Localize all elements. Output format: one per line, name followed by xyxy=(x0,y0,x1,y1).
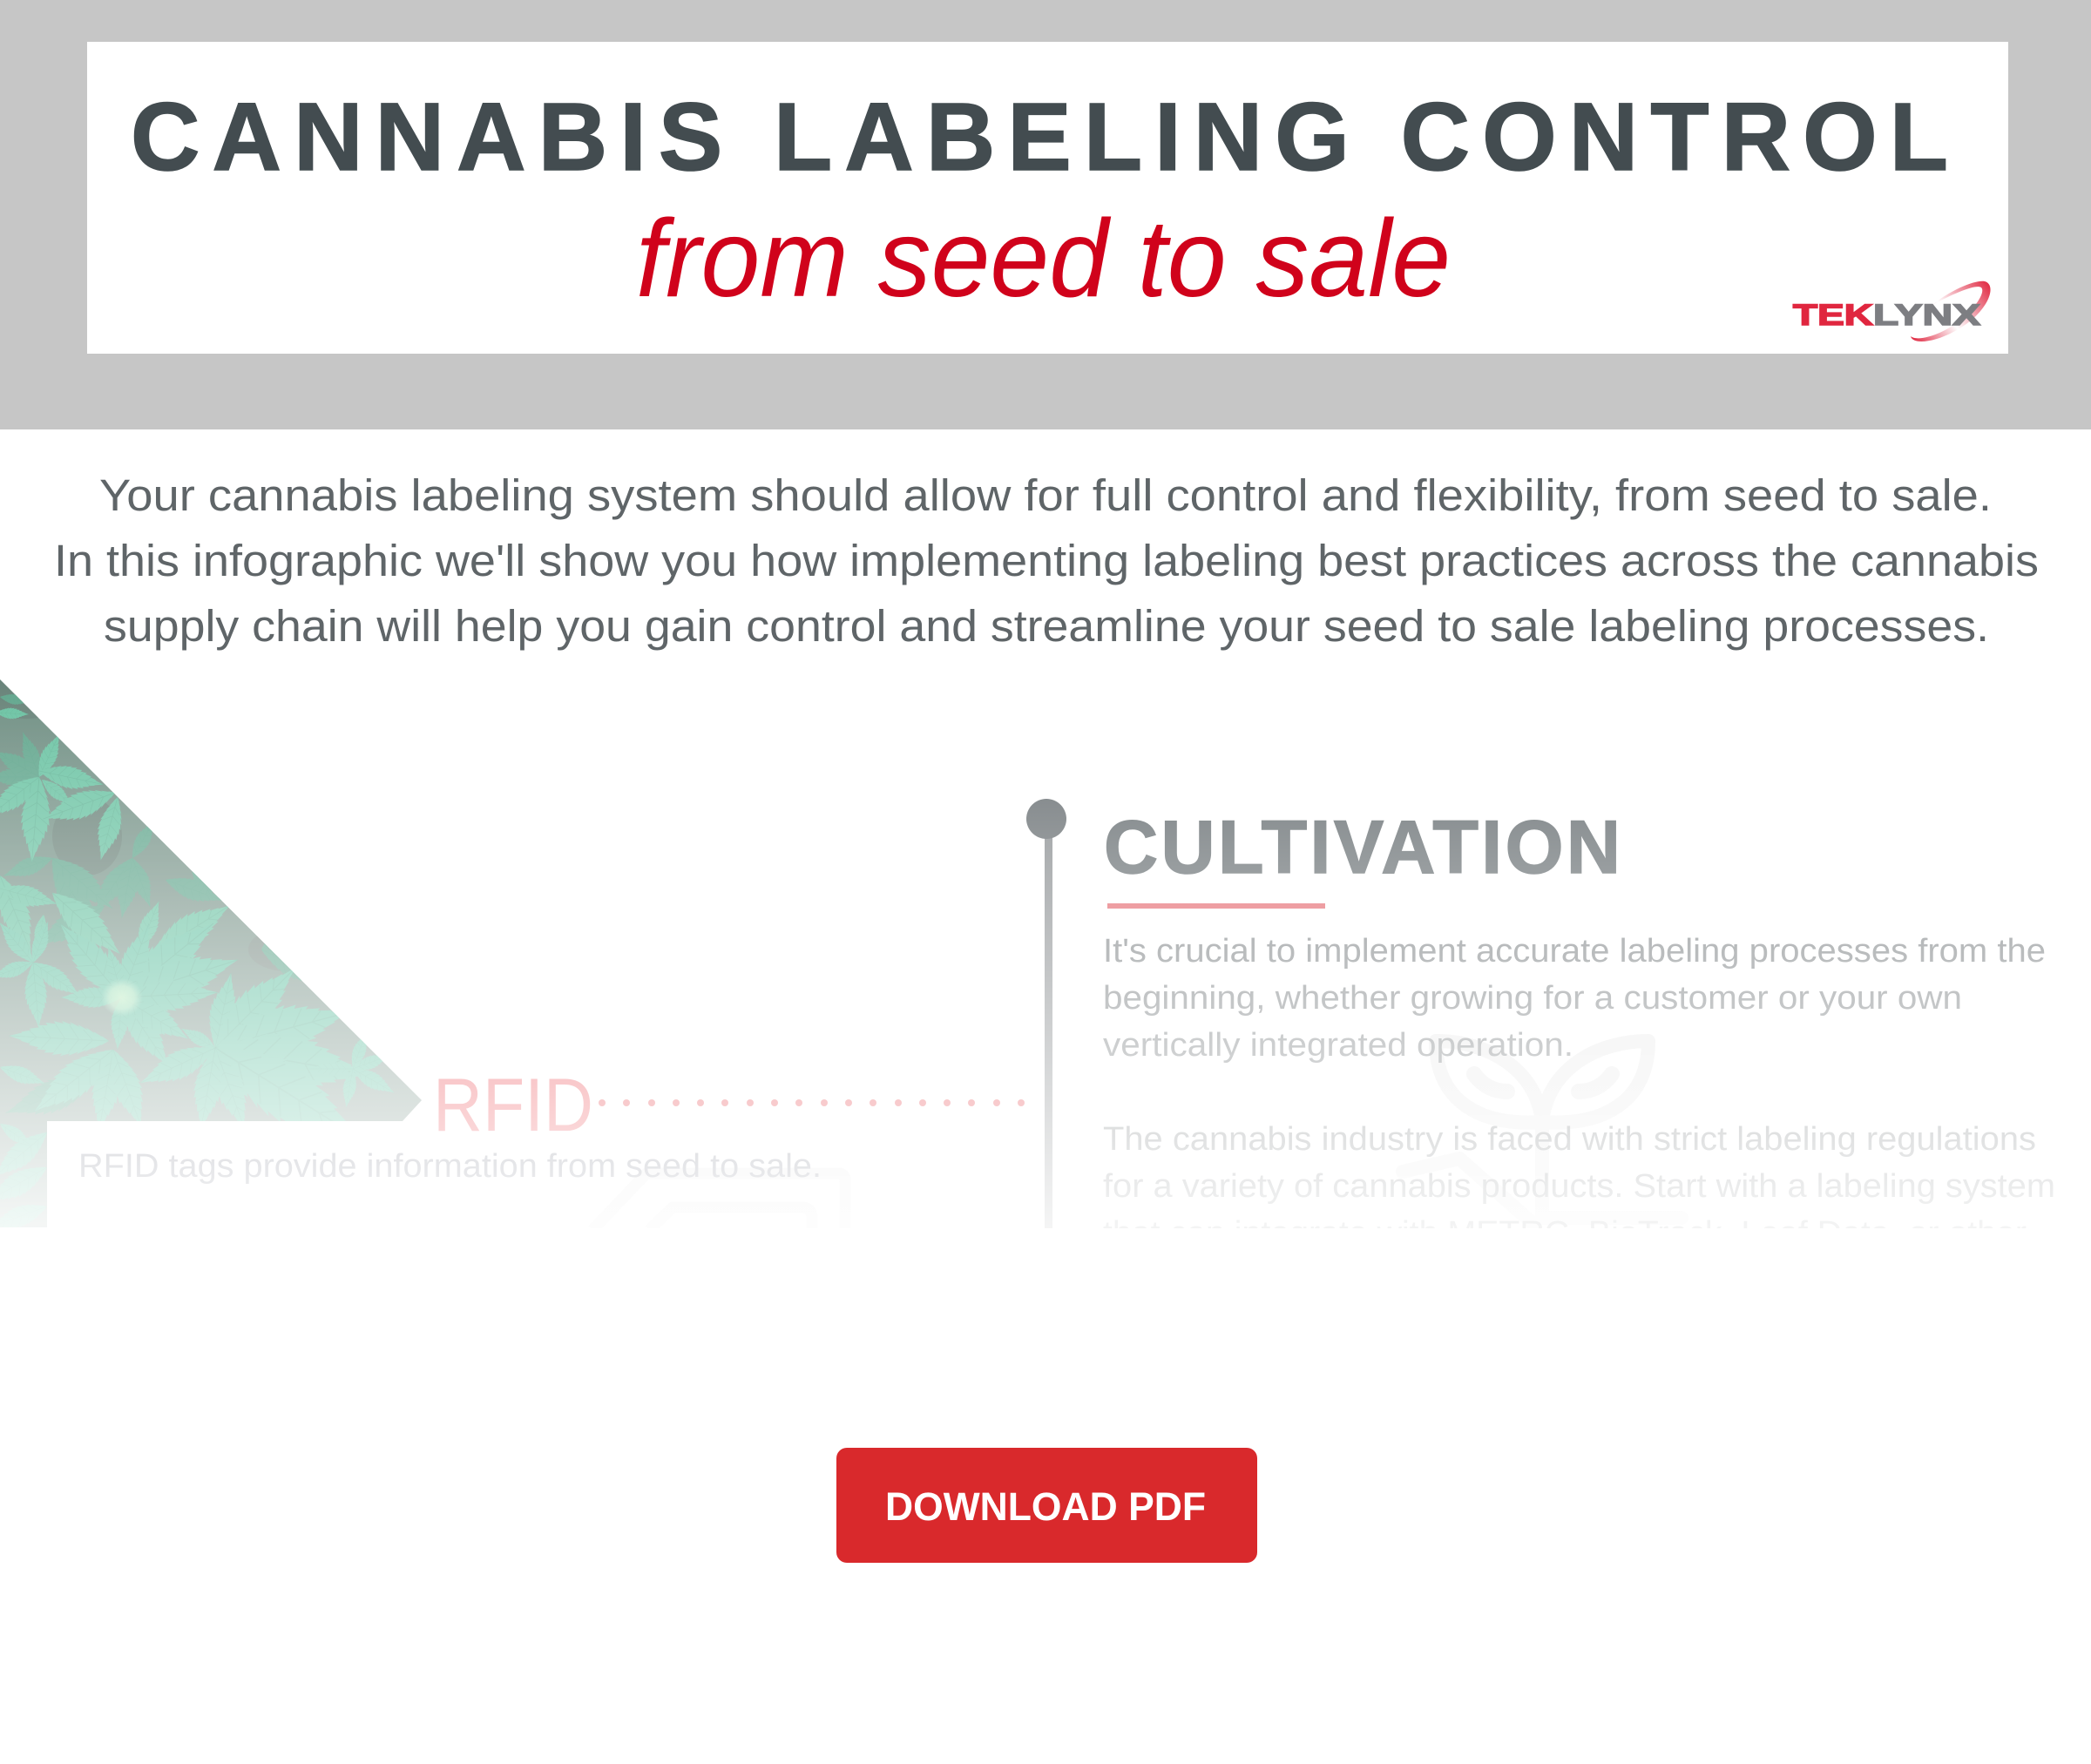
icon: RFID chip outline xyxy=(592,1173,845,1230)
cultivation paragraph one xyxy=(1103,933,2046,1064)
title: CANNABIS LABELING CONTROL xyxy=(131,84,1948,191)
cultivation paragraph two: that can integrate with METRC, BioTrack, Leaf Data, or other xyxy=(1103,1215,2027,1252)
CULTIVATION heading: CULTIVATION xyxy=(1104,806,1621,889)
fade overlay xyxy=(0,662,2091,1228)
timeline xyxy=(1026,799,1066,1237)
left hub xyxy=(31,922,49,963)
cannabis photo xyxy=(0,671,436,1237)
logo: TEKLYNX xyxy=(1793,281,1991,341)
RFID description: RFID tags provide information from seed to sale. xyxy=(78,1148,822,1185)
cultivation paragraph two xyxy=(1103,1125,2053,1228)
small hub xyxy=(352,1038,367,1067)
intro text xyxy=(54,470,2039,651)
heading underline xyxy=(1107,903,1325,909)
intro text: In this infographic we'll show you how implementing labeling best practices across the cannabis xyxy=(54,536,2039,585)
download button: DOWNLOAD PDF xyxy=(885,1484,1206,1529)
subtitle: from seed to sale xyxy=(636,197,1451,320)
logo: TEKLYNX: TEK xyxy=(1793,299,1874,332)
bud xyxy=(104,981,140,1014)
header band xyxy=(0,0,2091,429)
cultivation paragraph two: for a variety of cannabis products. Start with a labeling system xyxy=(1103,1168,2055,1205)
logo: TEKLYNX: LYNX xyxy=(1873,299,1980,332)
cultivation paragraph one: It's crucial to implement accurate labeling processes from the xyxy=(1103,933,2046,970)
bottom-left xyxy=(11,1132,47,1154)
download button xyxy=(836,1448,1257,1563)
cultivation paragraph one: vertically integrated operation. xyxy=(1103,1027,1573,1064)
lower hub xyxy=(92,1052,117,1121)
cultivation paragraph one: beginning, whether growing for a customer or your own xyxy=(1103,980,1962,1017)
RFID dotted connector xyxy=(599,1099,1025,1106)
big hub xyxy=(209,973,235,1047)
intro text: supply chain will help you gain control and streamline your seed to sale labeling processes. xyxy=(104,601,1989,651)
title panel xyxy=(87,42,2008,354)
RFID heading: RFID xyxy=(433,1064,593,1147)
faded content section xyxy=(0,662,2091,1252)
intro text: Your cannabis labeling system should allow for full control and flexibility, from seed to sale. xyxy=(99,470,1992,520)
icon: plant seedling xyxy=(1431,1034,1654,1038)
bud leaves xyxy=(136,923,213,983)
cultivation paragraph two: The cannabis industry is faced with strict labeling regulations xyxy=(1103,1121,2036,1158)
